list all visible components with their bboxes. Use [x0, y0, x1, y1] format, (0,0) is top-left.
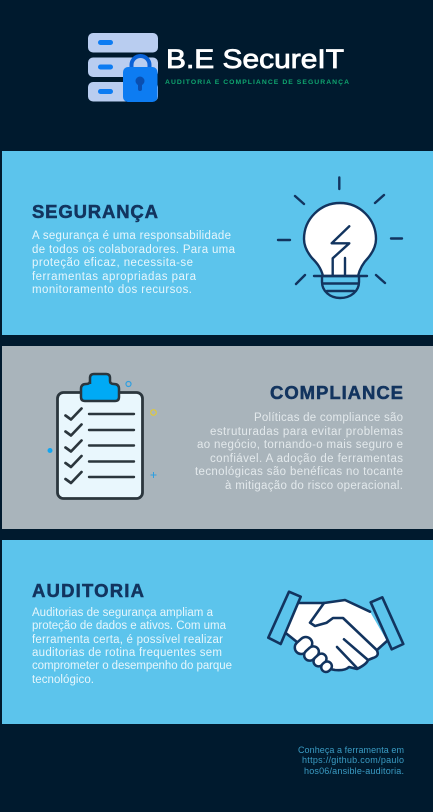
text block: segurança: [32, 230, 236, 296]
text block: compliance: estruturadas para evitar problemas: [210, 426, 403, 438]
icon: light bulb: [278, 178, 402, 298]
text block: segurança: de todos os colaboradores. Para uma: [32, 244, 236, 256]
text block: compliance: tecnológicas são benéficas no tocante: [195, 466, 403, 478]
text block: compliance: à mitigação do risco operacional.: [225, 480, 403, 492]
text block: auditoria: proteção de dados e ativos. Com uma: [32, 620, 227, 632]
text block: segurança: monitoramento dos recursos.: [32, 284, 192, 296]
text block: auditoria: tecnológico.: [32, 674, 94, 686]
text block: segurança: proteção eficaz, necessita-se: [32, 257, 193, 269]
text block: auditoria: comprometer o desempenho do parque: [32, 660, 232, 672]
text block: compliance: ao negócio, tornando-o mais seguro e: [197, 439, 403, 451]
text block: compliance: [195, 412, 403, 492]
header logo: [88, 33, 349, 102]
text block: auditoria: ferramenta certa, é possível realizar: [32, 634, 223, 646]
text block: auditoria: auditorias de rotina frequentes sem: [32, 647, 222, 659]
footer note: https://github.com/paulo: [302, 755, 404, 765]
subtitle: AUDITORIA E COMPLIANCE DE SEGURANÇA: [165, 79, 349, 86]
text block: auditoria: [32, 607, 232, 686]
panel: compliance: [2, 346, 433, 529]
panel: auditoria: [2, 540, 433, 724]
footer note: [298, 745, 404, 776]
footer note: Conheça a ferramenta em: [298, 745, 404, 755]
clipboard clip: [81, 374, 119, 401]
heading: auditoria: AUDITORIA: [32, 580, 144, 601]
panel: segurança: [2, 151, 433, 335]
text block: segurança: ferramentas apropriadas para: [32, 271, 197, 283]
title: B.E SecureIT: [166, 44, 344, 74]
icon: clipboard checklist: [48, 374, 156, 498]
heading: segurança: SEGURANÇA: [32, 201, 158, 222]
text block: compliance: Políticas de compliance são: [254, 412, 403, 424]
heading: compliance: COMPLIANCE: [270, 382, 403, 403]
icon: server with padlock: [88, 33, 158, 102]
text block: segurança: A segurança é uma responsabilidade: [32, 230, 231, 242]
text block: compliance: confiável. A adoção de ferramentas: [210, 453, 403, 465]
text block: auditoria: Auditorias de segurança ampliam a: [32, 607, 214, 619]
icon: handshake: [268, 592, 403, 674]
footer note: hos06/ansible-auditoria.: [304, 766, 404, 776]
